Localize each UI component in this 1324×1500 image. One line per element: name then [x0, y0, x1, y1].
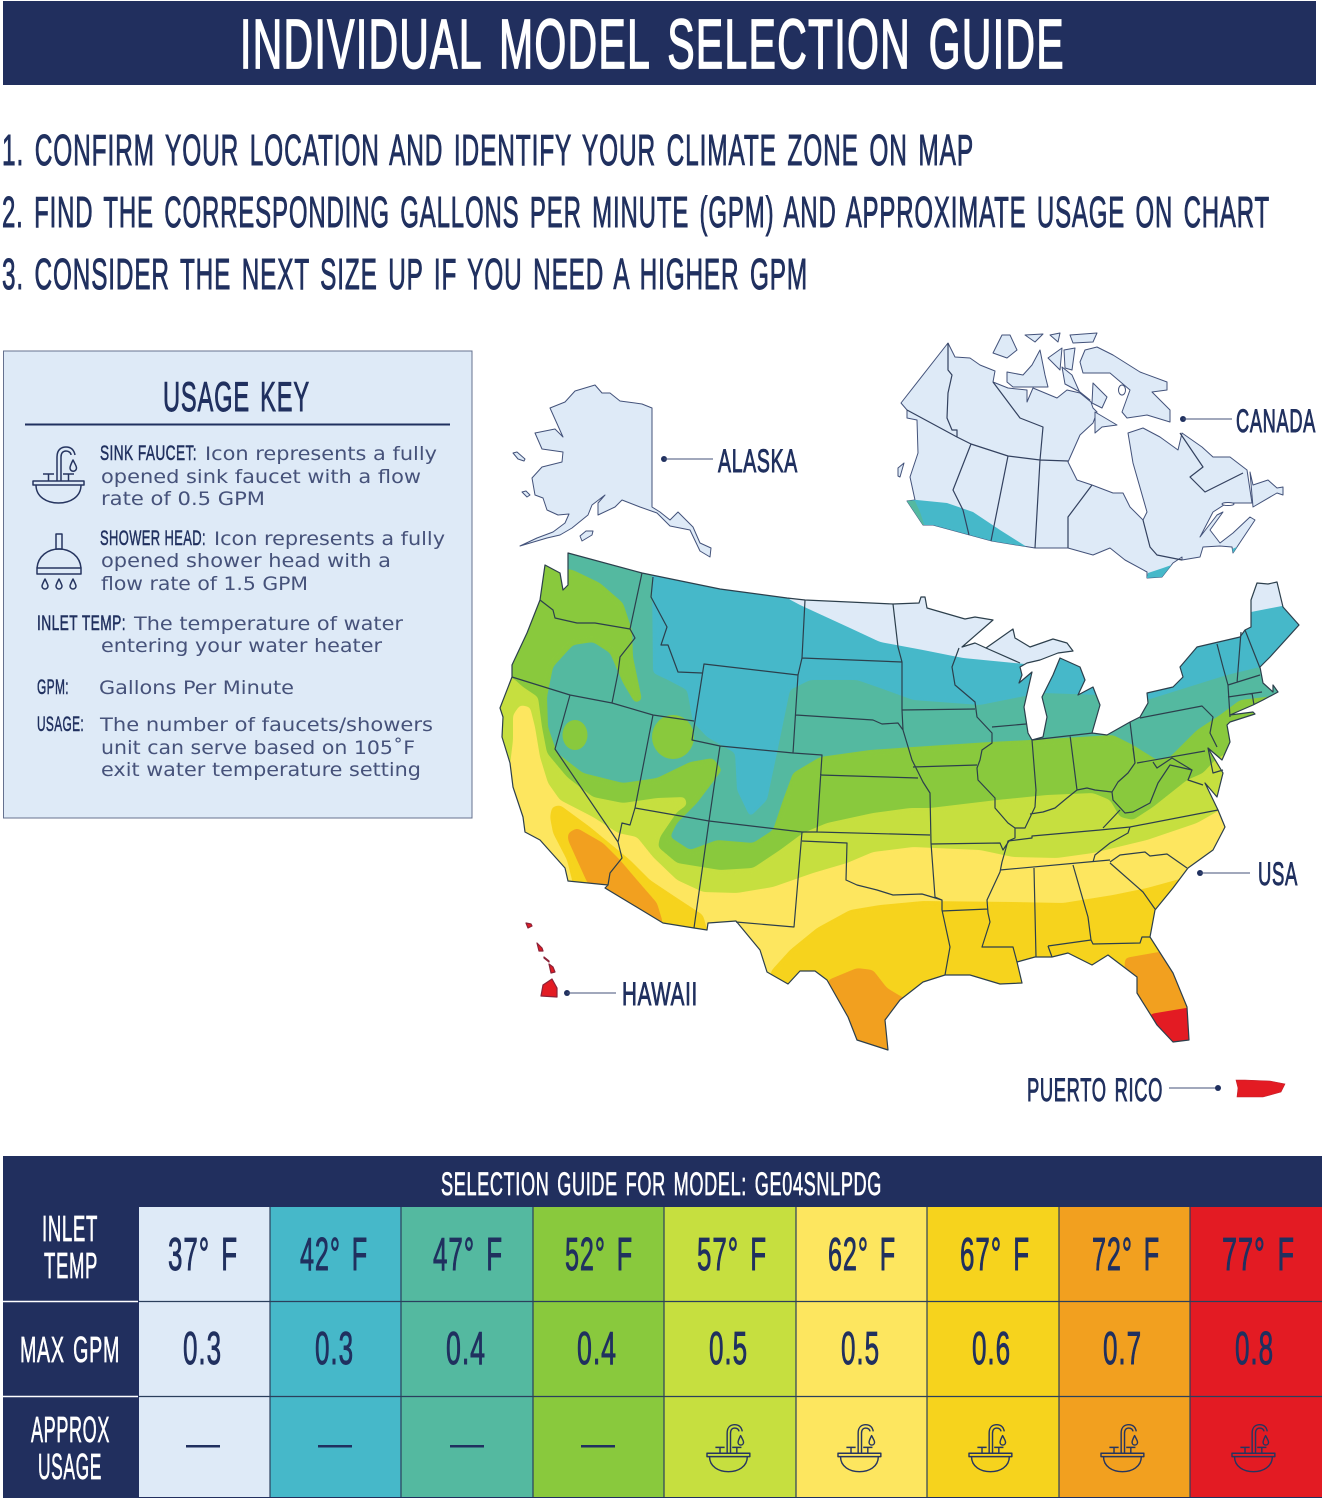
max gpm row: 0.5 [709, 1322, 748, 1374]
map: alaska [513, 385, 798, 557]
max gpm row: 0.4 [446, 1322, 486, 1374]
inlet temperature row: 72° F [1092, 1228, 1160, 1280]
inlet temperature row: 47° F [433, 1228, 503, 1280]
text: shower head definition: flow rate of 1.5 GPM [101, 573, 308, 595]
row labels [20, 1208, 120, 1487]
inlet temperature row: 42° F [300, 1228, 368, 1280]
label: alaska [661, 443, 798, 479]
row labels: INLET [42, 1208, 98, 1249]
text: shower head definition: opened shower head with a [101, 550, 391, 572]
text: inlet temp definition: The temperature of water [133, 613, 403, 635]
icon: sink faucet [33, 447, 84, 503]
max gpm row: 0.5 [841, 1322, 880, 1374]
text: usage definition [37, 713, 433, 781]
text: sink faucet definition: SINK FAUCET: [100, 442, 197, 465]
text: inlet temp definition: INLET TEMP: [37, 612, 126, 635]
icon: shower head [37, 534, 81, 589]
label: hawaii [564, 976, 698, 1012]
inlet temperature row: 52° F [565, 1228, 633, 1280]
inlet temperature row: 67° F [960, 1228, 1030, 1280]
row labels: MAX GPM [20, 1329, 120, 1370]
text: inlet temp definition [37, 612, 403, 657]
label: puerto rico: PUERTO RICO [1027, 1072, 1163, 1108]
label: usa [1197, 856, 1298, 892]
map: canada [898, 333, 1316, 585]
max gpm row: 0.3 [315, 1322, 354, 1374]
text: sink faucet definition: Icon represents a fully [205, 443, 437, 465]
text: sink faucet definition [100, 442, 437, 510]
max gpm row: 0.3 [183, 1322, 222, 1374]
approx usage dashes [186, 1445, 615, 1448]
text: usage definition: unit can serve based on 105˚F [101, 737, 415, 759]
text: sink faucet definition: opened sink faucet with a flow [101, 466, 421, 488]
text: shower head definition [100, 527, 445, 595]
text: shower head definition: SHOWER HEAD: [100, 527, 206, 550]
selection guide table [3, 1156, 1322, 1498]
label: canada [1180, 403, 1316, 439]
text: gpm definition: GPM: [37, 676, 69, 699]
max gpm row: 0.8 [1235, 1322, 1274, 1374]
row labels: TEMP [44, 1245, 98, 1286]
text: sink faucet definition: rate of 0.5 GPM [101, 488, 265, 510]
instruction steps [2, 126, 1270, 299]
map: contiguous usa climate zones [499, 552, 1300, 1051]
label: alaska: ALASKA [718, 443, 798, 479]
max gpm row: 0.7 [1103, 1322, 1142, 1374]
inlet temperature row: 57° F [697, 1228, 767, 1280]
max gpm row: 0.6 [972, 1322, 1011, 1374]
text: usage definition: USAGE: [37, 713, 84, 736]
map: hawaii [526, 923, 698, 1012]
text: usage definition: The number of faucets/showers [99, 714, 433, 736]
text: usage definition: exit water temperature setting [101, 759, 421, 781]
max gpm row [183, 1322, 1274, 1374]
approx usage sink icons [707, 1425, 1275, 1472]
panel: usage key [4, 351, 472, 818]
text: gpm definition: Gallons Per Minute [99, 677, 294, 699]
text: gpm definition [37, 676, 294, 699]
heading: usage key: USAGE KEY [163, 373, 310, 420]
max gpm row: 0.4 [577, 1322, 617, 1374]
inlet temperature row: 37° F [168, 1228, 238, 1280]
label: hawaii: HAWAII [622, 976, 698, 1012]
row labels: USAGE [38, 1446, 102, 1487]
map: puerto rico [1027, 1072, 1285, 1108]
zone colour columns [3, 1207, 1322, 1497]
text: shower head definition: Icon represents a fully [214, 528, 445, 550]
text: inlet temp definition: entering your water heater [101, 635, 382, 657]
table heading: SELECTION GUIDE FOR MODEL: GE04SNLPDG [441, 1166, 882, 1202]
inlet temperature row: 62° F [828, 1228, 896, 1280]
inlet temperature row [168, 1228, 1295, 1280]
row labels: APPROX [31, 1409, 110, 1450]
